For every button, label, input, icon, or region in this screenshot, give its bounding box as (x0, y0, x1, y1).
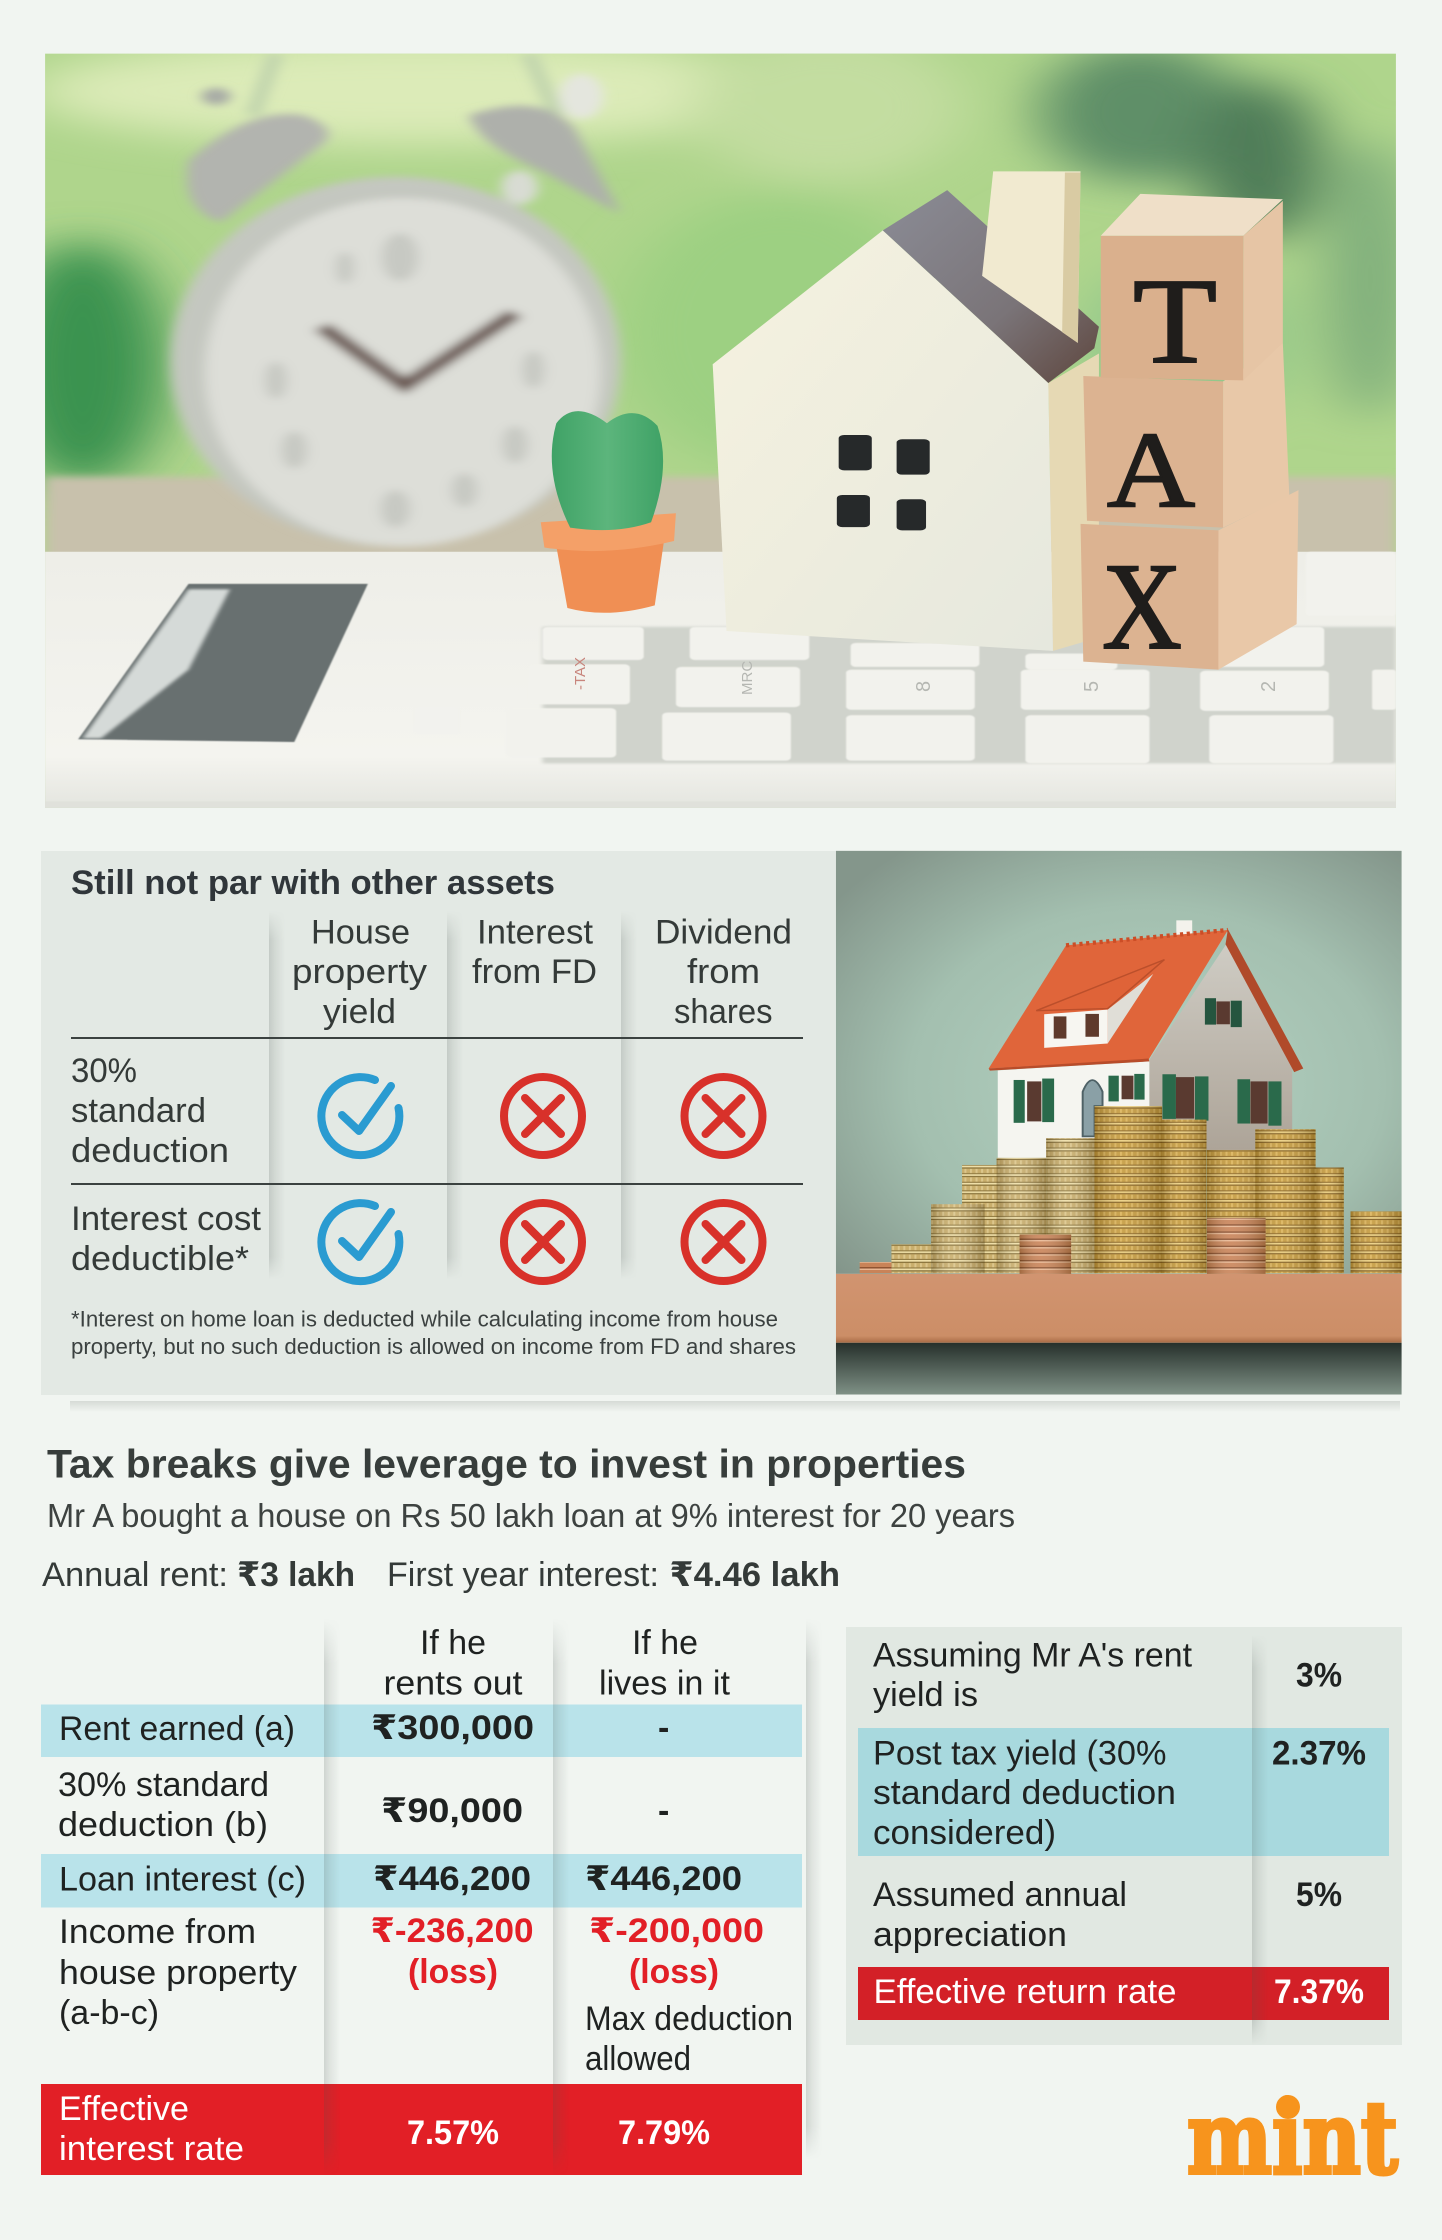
row label: 30% standard deduction: standard (71, 1092, 206, 1130)
row: rent earned: - (658, 1709, 669, 1747)
footnote (71, 1306, 796, 1359)
heading: tax breaks: Tax breaks give leverage to invest in properties (47, 1442, 966, 1486)
photo: model house with TAX blocks on a calculator (0, 32, 1416, 808)
column header: lives in it: If he (632, 1624, 698, 1662)
rent and interest summary (42, 1556, 840, 1594)
row: loan interest: ₹446,200 (373, 1860, 531, 1898)
row: income from house property: (a-b-c) (59, 1994, 159, 2032)
column header: house property yield: yield (323, 993, 396, 1031)
row: standard deduction: 30% standard (58, 1766, 269, 1804)
row: rent earned: Rent earned (a) (59, 1710, 295, 1748)
row highlight: effective interest rate (41, 2084, 802, 2175)
row: standard deduction (58, 1766, 669, 1844)
icon: red cross, shares row 2 (684, 1203, 762, 1281)
column header: dividend from shares: Dividend (655, 914, 792, 952)
panel: effective return (846, 1627, 1402, 2045)
icon: blue check, row 2 (321, 1203, 399, 1281)
row: effective interest rate: 7.57% (407, 2114, 499, 2152)
panel: still not par with other assets (41, 851, 836, 1395)
key labels: -TAX (572, 657, 589, 690)
row: income from house property: ₹-200,000 (589, 1912, 764, 1950)
row: income from house property: Income from (59, 1913, 256, 1951)
row: standard deduction: - (658, 1792, 669, 1830)
row: income from house property: (loss) (408, 1953, 498, 1991)
shutters and windows (1014, 998, 1281, 1126)
row: effective interest rate: 7.79% (618, 2114, 710, 2152)
key labels (572, 657, 1280, 695)
key labels: 2 (1258, 681, 1280, 692)
row: standard deduction: ₹90,000 (381, 1792, 523, 1830)
key labels: 8 (913, 681, 935, 692)
row: loan interest: Loan interest (c) (59, 1860, 306, 1898)
row: standard deduction: deduction (b) (58, 1806, 268, 1844)
icon: red cross, FD row 2 (504, 1203, 582, 1281)
row highlight: loan interest (41, 1854, 802, 1908)
footnote: *Interest on home loan is deducted while calculating income from house (71, 1306, 778, 1332)
row: post tax yield: Post tax yield (30% (873, 1734, 1166, 1772)
block letters: T (1133, 254, 1217, 389)
calculator display (78, 584, 368, 742)
row: rent yield: yield is (873, 1676, 978, 1714)
row label: interest cost deductible: Interest cost (71, 1200, 262, 1238)
row: effective interest rate (59, 2090, 710, 2168)
icon: red cross, shares row 1 (684, 1077, 762, 1155)
row: income from house property: Max deduction (585, 2000, 793, 2038)
row highlight: rent earned (41, 1704, 802, 1757)
column header: rents out: If he (420, 1624, 486, 1662)
row highlight: post tax yield (858, 1728, 1389, 1856)
column header: interest from FD (472, 914, 597, 991)
row: income from house property: allowed (585, 2040, 691, 2078)
wooden house (713, 171, 1099, 651)
column header: house property yield (292, 914, 427, 1031)
calculator keys (541, 551, 1396, 764)
row: effective interest rate: Effective (59, 2090, 189, 2128)
column header: dividend from shares: from (687, 953, 760, 991)
wooden blocks (1081, 194, 1298, 670)
row: assumed appreciation: 5% (1296, 1876, 1342, 1914)
photo: house on stacks of coins (836, 851, 1402, 1395)
row: effective return rate: Effective return rate (874, 1973, 1176, 2011)
row: assumed appreciation: appreciation (873, 1916, 1067, 1954)
row: loan interest: ₹446,200 (585, 1860, 742, 1898)
row: effective return rate: 7.37% (1274, 1973, 1364, 2011)
column header: lives in it: lives in it (599, 1664, 731, 1702)
row label: 30% standard deduction: 30% (71, 1052, 137, 1090)
row label: interest cost deductible (71, 1200, 262, 1278)
rent and interest summary: ₹4.46 lakh (670, 1556, 840, 1594)
row highlight: effective return rate (858, 1967, 1389, 2020)
rent and interest summary: Annual rent: (42, 1556, 228, 1594)
column header: rents out (384, 1624, 523, 1702)
rent and interest summary: ₹3 lakh (237, 1556, 355, 1594)
blurred alarm clock (170, 54, 621, 546)
row: effective return rate (874, 1973, 1364, 2011)
key labels: 5 (1081, 681, 1103, 692)
row: post tax yield: 2.37% (1272, 1734, 1366, 1772)
column header: lives in it (599, 1624, 731, 1702)
row: rent yield (873, 1636, 1342, 1714)
column header: dividend from shares (655, 914, 792, 1031)
row: assumed appreciation (873, 1876, 1342, 1954)
block letters (1102, 254, 1217, 675)
row: rent yield: 3% (1296, 1656, 1342, 1694)
row label: interest cost deductible: deductible* (71, 1240, 249, 1278)
row: rent earned (59, 1709, 669, 1748)
row: rent yield: Assuming Mr A's rent (873, 1636, 1193, 1674)
column header: dividend from shares: shares (674, 993, 772, 1031)
row: effective interest rate: interest rate (59, 2130, 244, 2168)
row label: 30% standard deduction: deduction (71, 1132, 229, 1170)
logo: mint: mint (1187, 2079, 1398, 2197)
calculator body (45, 552, 1396, 808)
icon: blue check, row 1 (321, 1077, 399, 1155)
key labels: MRC (739, 661, 756, 695)
coin stacks (860, 1106, 1402, 1274)
icon: red cross, FD row 1 (504, 1077, 582, 1155)
model house (989, 920, 1303, 1158)
row: assumed appreciation: Assumed annual (873, 1876, 1127, 1914)
cactus in orange pot (541, 411, 676, 613)
column header: house property yield: property (292, 953, 427, 991)
panel title: Still not par with other assets (71, 864, 555, 902)
column header: rents out: rents out (384, 1664, 523, 1702)
block letters: A (1107, 411, 1195, 530)
row: income from house property: house property (59, 1954, 297, 1992)
row: loan interest (59, 1860, 742, 1898)
footnote: property, but no such deduction is allowed on income from FD and shares (71, 1334, 796, 1359)
row: post tax yield (873, 1734, 1366, 1852)
column header: interest from FD: from FD (472, 953, 597, 991)
row: post tax yield: standard deduction (873, 1774, 1176, 1812)
section divider shadow (70, 1401, 1400, 1412)
row: income from house property: ₹-236,200 (370, 1912, 534, 1950)
subheading: loan details: Mr A bought a house on Rs 50 lakh loan at 9% interest for 20 years (47, 1497, 1015, 1534)
row: rent earned: ₹300,000 (371, 1709, 534, 1747)
row: income from house property: (loss) (629, 1953, 719, 1991)
row: income from house property (59, 1912, 793, 2078)
rent and interest summary: First year interest: (387, 1556, 659, 1594)
column header: interest from FD: Interest (477, 914, 594, 952)
row: post tax yield: considered) (873, 1814, 1056, 1852)
row label: 30% standard deduction (71, 1052, 229, 1170)
block letters: X (1102, 538, 1182, 675)
table: rent out vs live in (41, 1619, 822, 2175)
column header: house property yield: House (311, 914, 410, 952)
